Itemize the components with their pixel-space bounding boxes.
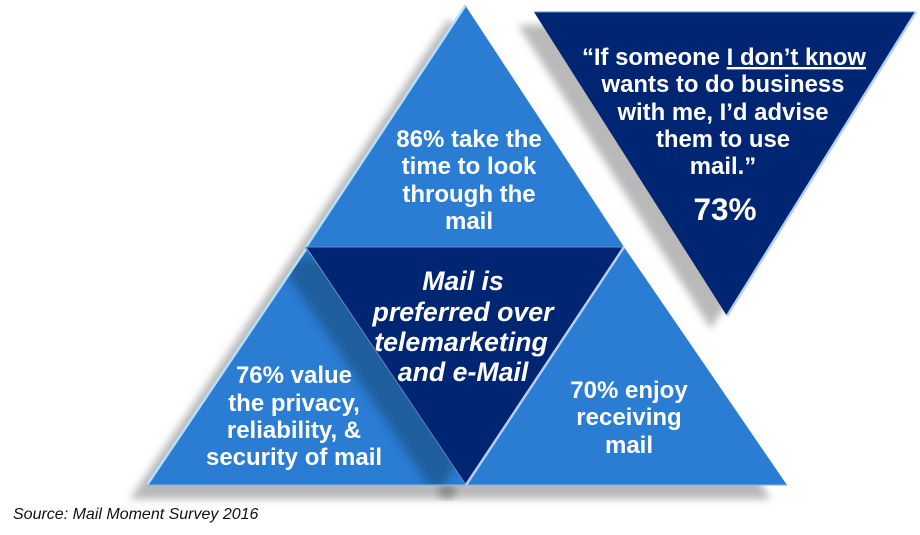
text: Mail is preferred over telemarketing and e-Mail <box>372 266 555 387</box>
text: quote: with me, I’d advise <box>616 99 829 126</box>
text: Mail is preferred over telemarketing and e-Mail: preferred over <box>372 297 555 327</box>
text: quote: them to use <box>656 126 790 153</box>
text: 86% take the time to look through the mail: time to look <box>402 153 537 180</box>
text: 76% value the privacy, reliability, & security of mail: reliability, & <box>227 417 361 444</box>
text: Mail is preferred over telemarketing and e-Mail: Mail is <box>422 266 504 296</box>
statistic: 73%: 73% <box>693 191 757 227</box>
shadow of centre triangle on left triangle <box>286 252 457 484</box>
pyramid shadow <box>130 18 771 499</box>
text: 70% enjoy receiving mail: 70% enjoy <box>570 377 688 404</box>
text: 86% take the time to look through the mail: through the <box>402 181 536 208</box>
text: quote <box>582 44 866 180</box>
text: 76% value the privacy, reliability, & security of mail: 76% value <box>236 362 352 389</box>
quote triangle shadow <box>518 25 900 329</box>
panel: centre inverted triangle <box>306 247 624 485</box>
shadow spot under centre triangle tip <box>438 484 456 498</box>
text: 86% take the time to look through the mail <box>396 126 542 235</box>
text: Mail is preferred over telemarketing and e-Mail: and e-Mail <box>398 357 529 387</box>
text: 76% value the privacy, reliability, & security of mail <box>206 362 382 471</box>
text: 76% value the privacy, reliability, & security of mail: security of mail <box>206 444 382 471</box>
panel: right triangle, 70% <box>466 247 787 485</box>
panel: quote inverted triangle <box>534 12 916 316</box>
text: quote: wants to do business <box>601 71 844 98</box>
text: Mail is preferred over telemarketing and e-Mail: telemarketing <box>374 327 548 357</box>
panel: left triangle, 76% <box>146 248 466 486</box>
text: 70% enjoy receiving mail: mail <box>605 432 653 459</box>
text: 86% take the time to look through the mail: 86% take the <box>396 126 542 153</box>
text: 70% enjoy receiving mail <box>570 377 688 459</box>
text: quote: mail.” <box>690 153 756 180</box>
panel: top triangle, 86% <box>306 5 624 247</box>
source note: Source: Mail Moment Survey 2016 <box>13 506 259 523</box>
text: 76% value the privacy, reliability, & security of mail: the privacy, <box>228 390 360 417</box>
text: 86% take the time to look through the mail: mail <box>445 208 493 235</box>
text: 70% enjoy receiving mail: receiving <box>576 404 682 431</box>
text: quote: “If someone I don’t know <box>582 44 866 71</box>
